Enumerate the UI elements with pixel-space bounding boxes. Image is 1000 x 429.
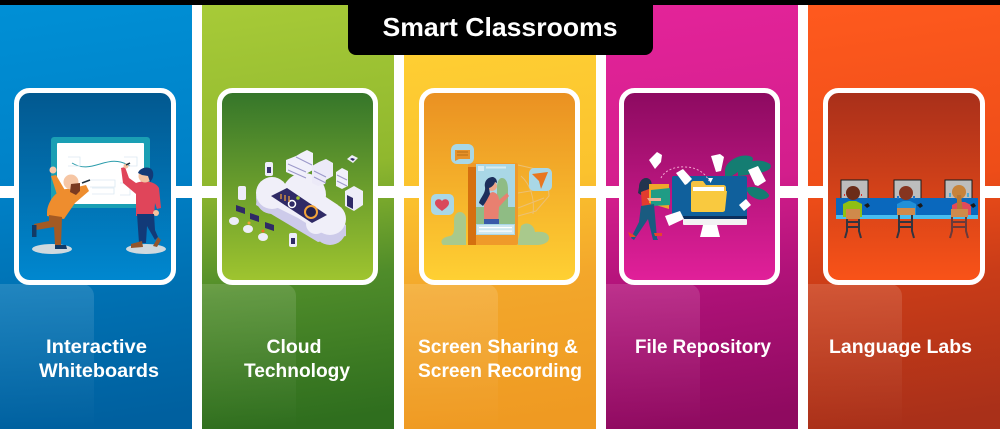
card: screen sharing bbox=[422, 90, 578, 282]
dashboard panel bbox=[271, 188, 327, 223]
card: cloud technology bbox=[220, 90, 376, 282]
label: screen sharing and recording: Screen Recording bbox=[418, 361, 582, 382]
label: language labs: Language Labs bbox=[829, 337, 972, 358]
icon: phone with presenter and social bubbles bbox=[431, 144, 552, 245]
label: cloud technology bbox=[244, 337, 350, 382]
icon: isometric cloud with servers bbox=[229, 150, 363, 247]
card: interactive whiteboards bbox=[16, 90, 174, 282]
label: interactive whiteboards: Interactive bbox=[46, 337, 147, 358]
card: language labs bbox=[826, 90, 982, 282]
cloud top bbox=[256, 173, 346, 235]
panel: cloud technology column bbox=[202, 5, 394, 429]
panel: language labs column bbox=[808, 5, 1000, 429]
server stacks bbox=[286, 150, 313, 178]
label: cloud technology: Cloud bbox=[266, 337, 322, 358]
icon: people drawing on whiteboard bbox=[32, 137, 166, 254]
label: interactive whiteboards: Whiteboards bbox=[39, 361, 159, 382]
icon: person filing documents into computer bbox=[628, 152, 771, 240]
label: interactive whiteboards bbox=[39, 337, 159, 382]
title banner bbox=[348, 0, 653, 55]
top black strip bbox=[0, 0, 1000, 5]
panel: screen sharing column bbox=[404, 5, 596, 429]
label: cloud technology: Technology bbox=[244, 361, 350, 382]
panel: interactive whiteboards column bbox=[0, 5, 192, 429]
icon: language lab students at desk bbox=[836, 180, 978, 238]
panel: file repository column bbox=[606, 5, 798, 429]
card: file repository bbox=[622, 90, 778, 282]
cloud extrusion bbox=[256, 181, 346, 245]
label: file repository: File Repository bbox=[635, 337, 771, 358]
label: screen sharing and recording bbox=[418, 337, 582, 382]
label: screen sharing and recording: Screen Sharing & bbox=[418, 337, 578, 358]
title: Smart Classrooms bbox=[382, 12, 618, 42]
connector band bbox=[0, 186, 1000, 198]
